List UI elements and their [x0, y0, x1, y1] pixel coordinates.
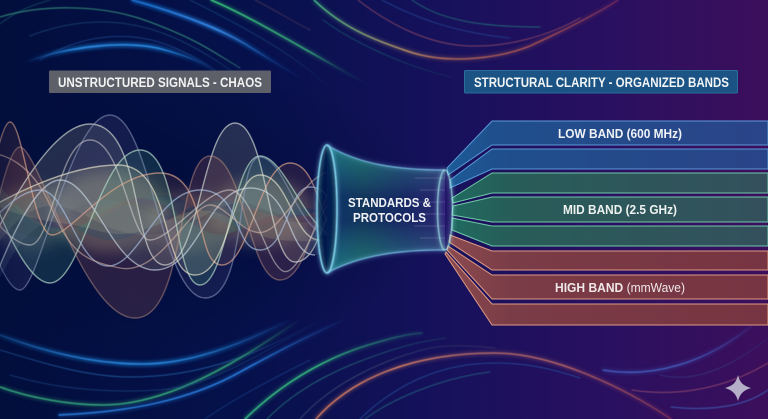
wave line 7: [0, 165, 320, 275]
wave line 1: [0, 122, 345, 265]
wave fill 5: [0, 147, 316, 318]
wave line 2: [0, 122, 327, 266]
wave line 5: [0, 147, 345, 318]
bottom flowing light streams: [0, 320, 768, 419]
chaotic overlapping signal waves: [0, 115, 355, 318]
wave fill 6: [0, 181, 319, 277]
panel: organized bands: [445, 121, 768, 325]
heading: unstructured signals: [49, 70, 271, 93]
wave fill 2: [0, 123, 318, 264]
low band ribbons: [447, 121, 768, 188]
label: low band: LOW BAND (600 MHz): [558, 127, 682, 141]
funnel entry ring: [317, 145, 337, 273]
wave line 9: [0, 140, 340, 272]
heading: unstructured signals: UNSTRUCTURED SIGNALS - CHAOS: [58, 75, 262, 90]
wave fill 4: [0, 150, 316, 284]
funnel label line two: PROTOCOLS: [353, 211, 426, 225]
funnel body: [327, 145, 445, 273]
icon: sparkle: [725, 375, 751, 401]
wave line 6: [0, 179, 315, 271]
label: high band: HIGH BAND (mmWave): [555, 281, 685, 295]
top flowing light streams: [0, 0, 620, 80]
funnel label: STANDARDS &: [348, 196, 431, 210]
mid band ribbons: [452, 173, 768, 246]
heading: structural clarity: [464, 70, 738, 93]
wave line 10: [0, 155, 340, 269]
centre haze behind waves: [0, 172, 314, 252]
wave line 3: [0, 115, 330, 298]
funnel: standards and protocols: [317, 145, 452, 273]
high band ribbons: [445, 235, 768, 325]
wave fill 7: [0, 165, 326, 275]
funnel streaks: [412, 178, 445, 238]
wave fill 1: [0, 122, 316, 264]
label: mid band: MID BAND (2.5 GHz): [563, 203, 677, 217]
wave line 4: [0, 150, 345, 285]
wave fill 3: [0, 116, 302, 298]
wave line 8: [0, 187, 345, 266]
funnel exit ring: [438, 170, 452, 250]
heading: structural clarity: STRUCTURAL CLARITY - ORGANIZED BANDS: [474, 75, 729, 90]
funnel edges: [327, 145, 445, 273]
